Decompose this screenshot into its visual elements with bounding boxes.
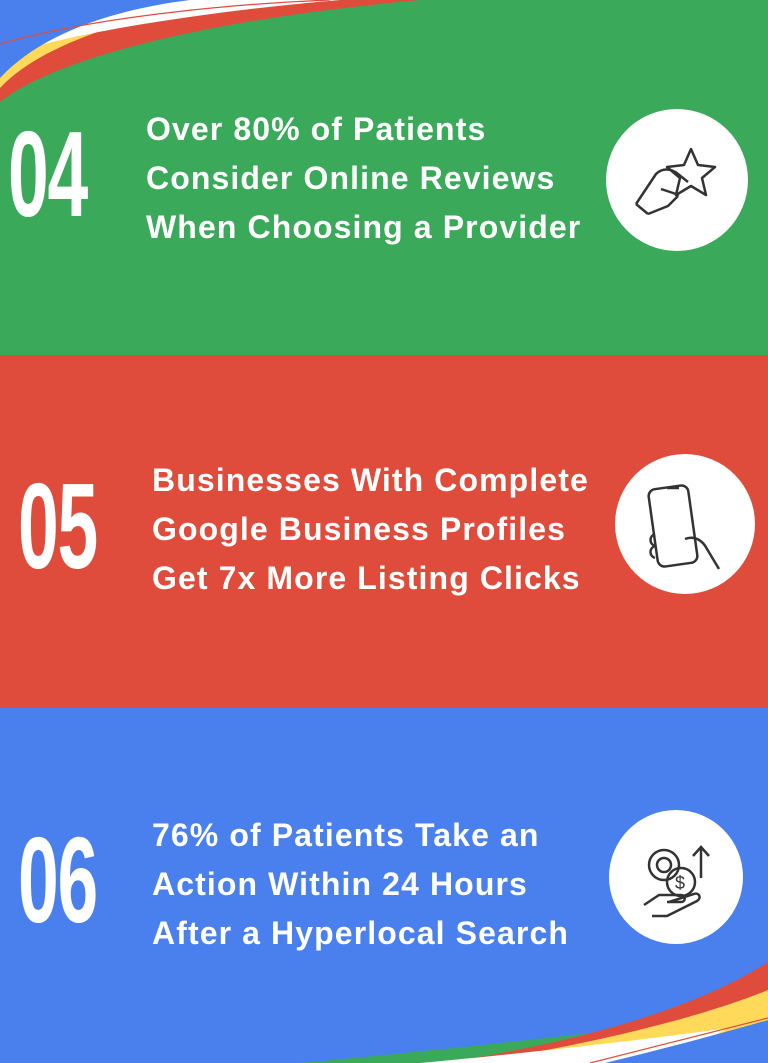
text 05: Get 7x More Listing Clicks xyxy=(152,560,581,596)
icon: gear dollar arrow hand: $ xyxy=(675,873,685,893)
text 06: Action Within 24 Hours xyxy=(152,866,528,902)
decorative bottom swoosh xyxy=(300,962,768,1063)
text 06: After a Hyperlocal Search xyxy=(152,915,569,951)
text 05: Businesses With Complete xyxy=(152,462,589,498)
text 04 xyxy=(146,111,581,245)
icon: hand with star xyxy=(606,109,748,251)
icon: gear dollar arrow hand xyxy=(609,810,743,944)
text 05: Google Business Profiles xyxy=(152,511,566,547)
number 05: 05 xyxy=(18,458,97,594)
panel: blue stat 06 xyxy=(0,708,768,1063)
text 04: Over 80% of Patients xyxy=(146,111,486,147)
text 06: 76% of Patients Take an xyxy=(152,817,540,853)
panel: green stat 04 xyxy=(0,0,768,355)
number 06: 06 xyxy=(18,812,97,948)
text 05 xyxy=(152,462,589,596)
icon: hand holding phone xyxy=(615,454,755,594)
text 06 xyxy=(152,817,569,951)
panel: red stat 05 xyxy=(0,355,768,708)
number 04: 04 xyxy=(8,106,87,242)
decorative top swoosh xyxy=(0,0,420,102)
text 04: Consider Online Reviews xyxy=(146,160,555,196)
text 04: When Choosing a Provider xyxy=(146,209,581,245)
